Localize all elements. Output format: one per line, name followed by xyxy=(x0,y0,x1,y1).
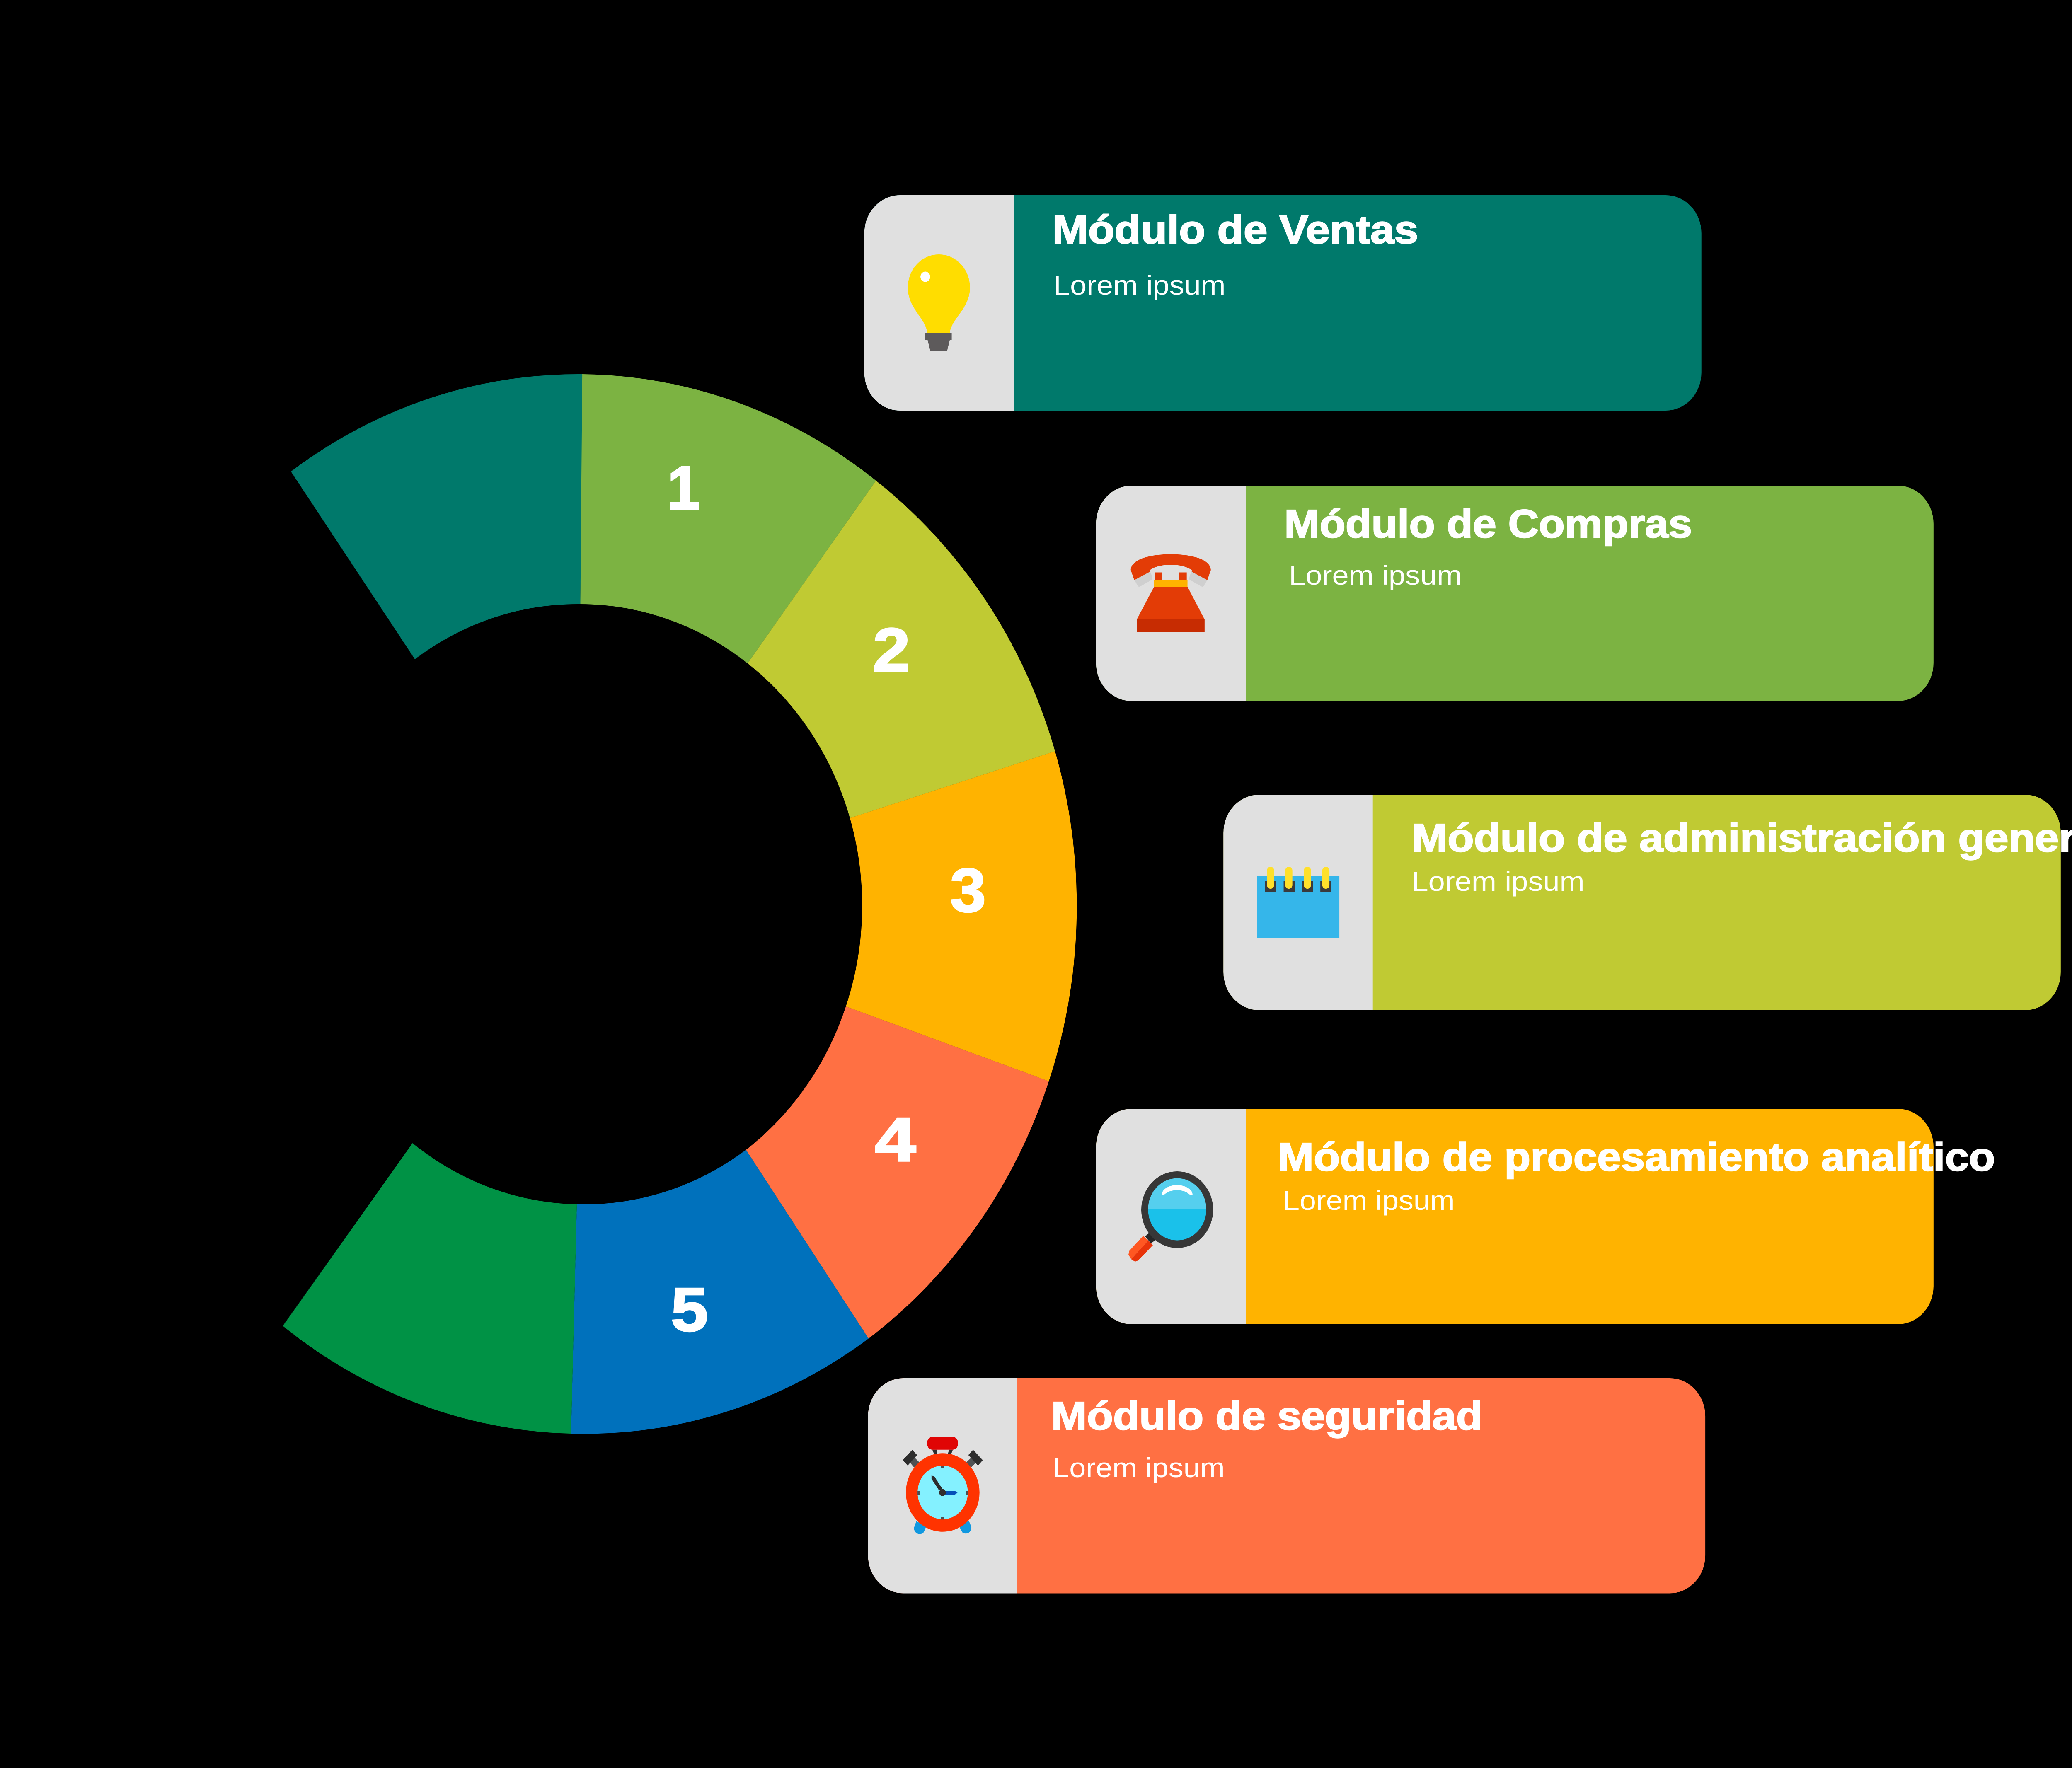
segment 5: blue xyxy=(571,1150,869,1434)
number 3: 3 xyxy=(950,856,986,925)
panel background xyxy=(868,1378,1705,1594)
panel: Módulo de seguridad xyxy=(868,1378,1705,1594)
icon: notebook xyxy=(1257,867,1339,938)
number 4: 4 xyxy=(875,1105,916,1174)
heading: Módulo de Compras xyxy=(1284,501,1692,546)
panel: Módulo de administración general xyxy=(1223,795,2072,1010)
heading: Módulo de administración general xyxy=(1411,815,2072,860)
icon: magnifier xyxy=(1128,1171,1213,1262)
body text: Lorem ipsum xyxy=(1289,560,1462,590)
number 2: 2 xyxy=(873,615,910,684)
icon tile xyxy=(864,195,1014,411)
heading: Módulo de Ventas xyxy=(1052,207,1418,252)
heading: Módulo de procesamiento analítico xyxy=(1278,1134,1995,1179)
body text: Lorem ipsum xyxy=(1283,1185,1455,1216)
segment: dark green xyxy=(283,1143,577,1434)
segment 4: coral xyxy=(746,1006,1049,1338)
number 5: 5 xyxy=(671,1275,708,1344)
panel: Módulo de procesamiento analítico xyxy=(1096,1109,1995,1324)
icon tile xyxy=(1223,795,1373,1010)
body text: Lorem ipsum xyxy=(1411,866,1585,897)
heading: Módulo de seguridad xyxy=(1051,1393,1482,1438)
body text: Lorem ipsum xyxy=(1053,270,1225,300)
icon tile xyxy=(1096,486,1246,701)
segment 3: amber xyxy=(846,751,1077,1081)
donut chart xyxy=(283,374,1077,1434)
number 1: 1 xyxy=(667,453,700,522)
icon tile xyxy=(868,1378,1017,1594)
segment: teal xyxy=(291,374,583,659)
panel: Módulo de Compras xyxy=(1096,486,1934,701)
panel background xyxy=(1223,795,2061,1010)
icon tile xyxy=(1096,1109,1246,1324)
segment 2: lime xyxy=(748,481,1055,818)
icon: light bulb xyxy=(908,254,970,351)
panel background xyxy=(1096,486,1934,701)
panel: Módulo de Ventas xyxy=(864,195,1702,411)
body text: Lorem ipsum xyxy=(1053,1452,1225,1483)
icon: alarm clock xyxy=(903,1437,983,1534)
segment 1: green xyxy=(580,374,876,663)
panel background xyxy=(864,195,1702,411)
icon: telephone xyxy=(1131,554,1211,632)
panel background xyxy=(1096,1109,1934,1324)
